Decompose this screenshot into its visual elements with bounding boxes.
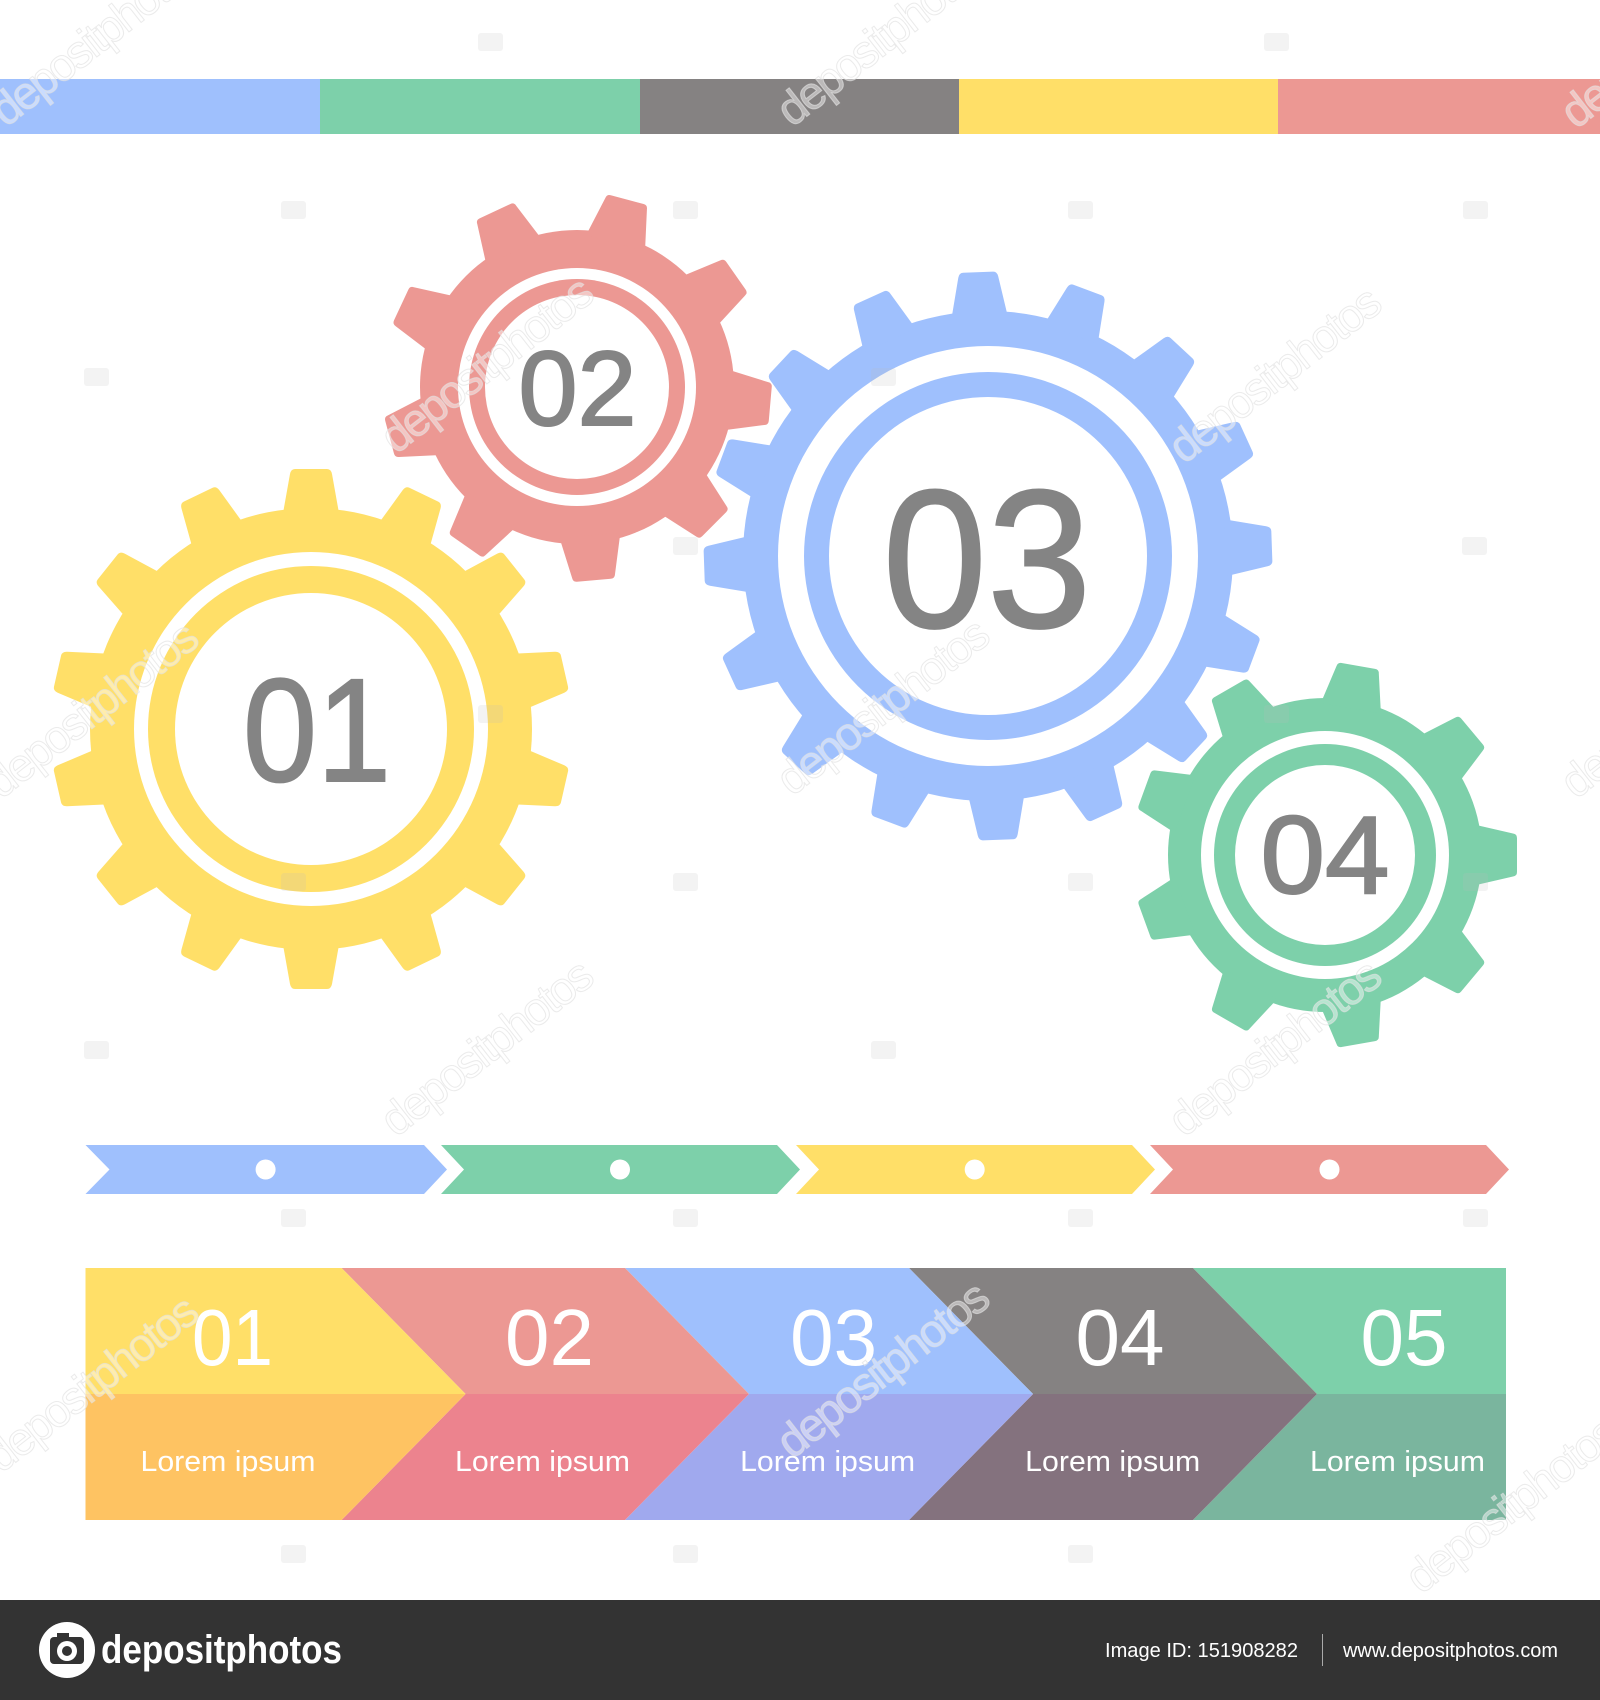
arrow segment 3 yellow <box>796 1145 1155 1194</box>
step 01 yellow: Lorem ipsum <box>140 1446 316 1478</box>
footer brand name: depositphotos <box>101 1628 342 1672</box>
step 04 gray <box>909 1268 1317 1520</box>
stock watermarks: depositphotos <box>766 607 999 805</box>
top colour bar <box>0 79 1600 134</box>
step 01 yellow <box>86 1268 466 1520</box>
step 01 yellow: 01 <box>192 1293 273 1382</box>
arrow segment 4 red <box>1150 1145 1509 1194</box>
step 03 blue: Lorem ipsum <box>740 1446 915 1478</box>
step 03 blue <box>625 1268 1033 1520</box>
gear 01 yellow <box>51 469 571 989</box>
gear 04 number: 04 <box>1260 794 1390 917</box>
footer logo icon <box>39 1622 95 1678</box>
step 04 gray: 04 <box>1076 1293 1164 1382</box>
stock watermarks: depositphotos <box>1158 948 1391 1146</box>
footer bar <box>0 1600 1600 1700</box>
stock watermarks: depositphotos <box>370 265 603 463</box>
arrow row timeline <box>86 1145 1509 1194</box>
stock watermarks: depositphotos <box>370 948 603 1146</box>
gear 01 number: 01 <box>243 649 391 813</box>
gear 02 red <box>382 192 773 583</box>
gear 04 green <box>1134 661 1517 1049</box>
step 05 green: Lorem ipsum <box>1310 1446 1485 1478</box>
image id: Image ID: 151908282 <box>1105 1640 1298 1662</box>
gear 02 number: 02 <box>518 330 636 448</box>
step 05 green: 05 <box>1360 1293 1448 1382</box>
step 02 red: Lorem ipsum <box>455 1446 630 1478</box>
gear 03 number: 03 <box>882 449 1092 669</box>
gear 03 blue <box>703 271 1273 841</box>
step 04 gray: Lorem ipsum <box>1025 1446 1200 1478</box>
step 05 green <box>1193 1268 1506 1520</box>
step 03 blue: 03 <box>790 1293 877 1382</box>
step 02 red: 02 <box>505 1293 594 1382</box>
step 02 red <box>342 1268 749 1520</box>
stock watermarks: depositphotos <box>766 1270 999 1468</box>
arrow segment 1 blue <box>86 1145 447 1194</box>
arrow segment 2 green <box>441 1145 800 1194</box>
stock watermarks: depositphotos <box>1158 275 1391 473</box>
website url: www.depositphotos.com <box>1342 1640 1558 1662</box>
five step chevron block chart <box>86 1268 1506 1520</box>
